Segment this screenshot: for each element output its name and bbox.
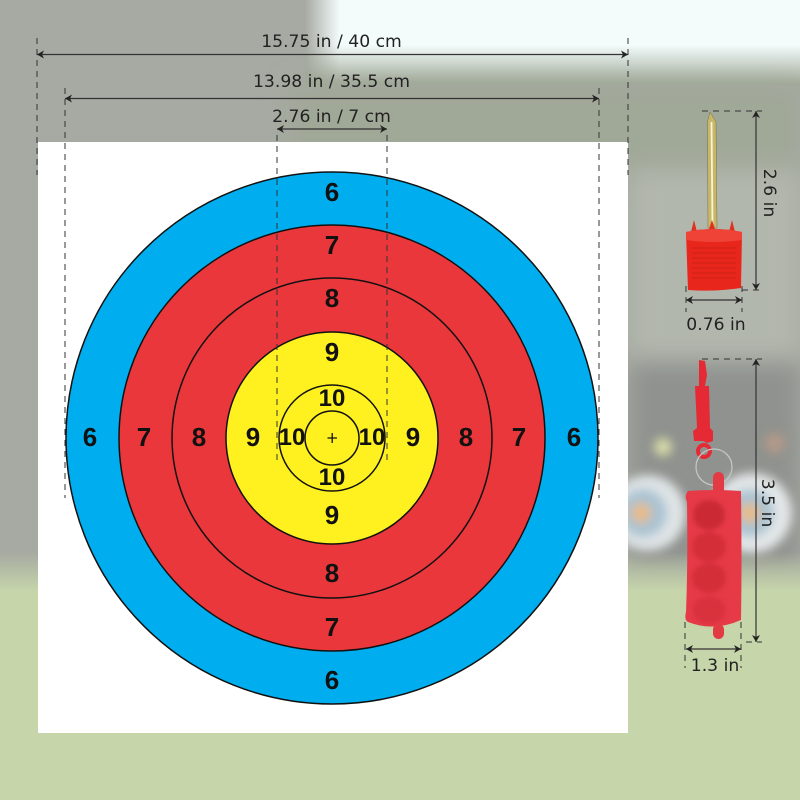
dimension: center ring [272,107,391,463]
ring score numbers: 10 [359,424,385,451]
ring score numbers: 10 [319,385,345,412]
dimension: tab width: 1.3 in [691,656,739,676]
ring score numbers: 6 [325,177,339,207]
ring score numbers: 9 [325,500,339,530]
dimension: pin height: 2.6 in [759,169,779,217]
dimension: tab height: 3.5 in [757,479,777,527]
dimension: sheet width: 15.75 in / 40 cm [261,32,402,52]
ring score numbers: 9 [246,422,260,452]
dimension: pin width: 0.76 in [686,315,746,335]
ring score numbers: 7 [137,422,151,452]
ring score numbers: 10 [319,464,345,491]
ring score numbers: 9 [406,422,420,452]
ring score numbers: 10 [279,424,305,451]
dimension: sheet width [37,32,628,175]
center cross [328,433,337,443]
icon: target pin [686,112,742,291]
ring score numbers: 6 [83,422,97,452]
dimension: tab width [685,622,741,676]
ring score numbers: 6 [325,665,339,695]
dimension: tab height [702,359,777,642]
target paper sheet [38,142,628,733]
ring score numbers: 8 [192,422,206,452]
dimension: center ring: 2.76 in / 7 cm [272,107,391,127]
dimension: pin height [702,111,779,290]
ring score numbers [83,177,581,695]
ring score numbers: 6 [567,422,581,452]
icon: red finger tab with clip [685,360,742,639]
ring score numbers: 7 [512,422,526,452]
ring score numbers: 8 [459,422,473,452]
ring score numbers: 9 [325,337,339,367]
ring score numbers: 7 [325,612,339,642]
dimension: target diameter: 13.98 in / 35.5 cm [253,72,410,92]
ring score numbers: 8 [325,558,339,588]
ring score numbers: 7 [325,230,339,260]
dimension: pin width [686,286,746,335]
ring score numbers: 8 [325,283,339,313]
target rings [66,172,598,704]
